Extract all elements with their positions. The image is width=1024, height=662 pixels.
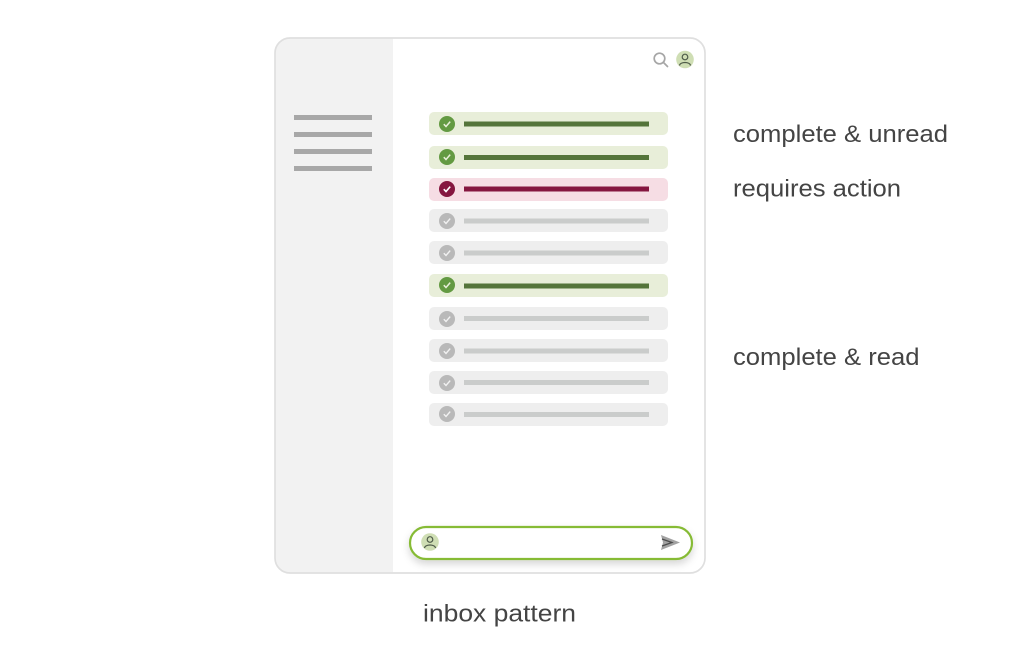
row 1: complete and unread	[429, 112, 668, 135]
label: requires action: requires action	[733, 176, 901, 202]
label: complete and unread: complete & unread	[733, 121, 948, 148]
row 10: complete and read	[429, 403, 668, 426]
row 6: complete and unread	[429, 274, 668, 297]
icon: input user avatar	[421, 533, 439, 551]
row 9: complete and read	[429, 371, 668, 394]
row 2: complete and unread	[429, 146, 668, 169]
panel: inbox window	[275, 38, 705, 573]
row 4: complete and read	[429, 209, 668, 232]
sidebar menu lines	[294, 115, 372, 171]
row 7: complete and read	[429, 307, 668, 330]
icon: send arrow	[661, 535, 680, 550]
message input bar	[410, 527, 692, 559]
caption: inbox pattern: inbox pattern	[423, 600, 576, 628]
row 3: requires action	[429, 178, 668, 201]
row 8: complete and read	[429, 339, 668, 362]
label: complete and read: complete & read	[733, 344, 920, 371]
row 5: complete and read	[429, 241, 668, 264]
panel: sidebar	[275, 38, 393, 573]
icon: user avatar	[676, 51, 694, 68]
icon: search	[654, 53, 668, 66]
